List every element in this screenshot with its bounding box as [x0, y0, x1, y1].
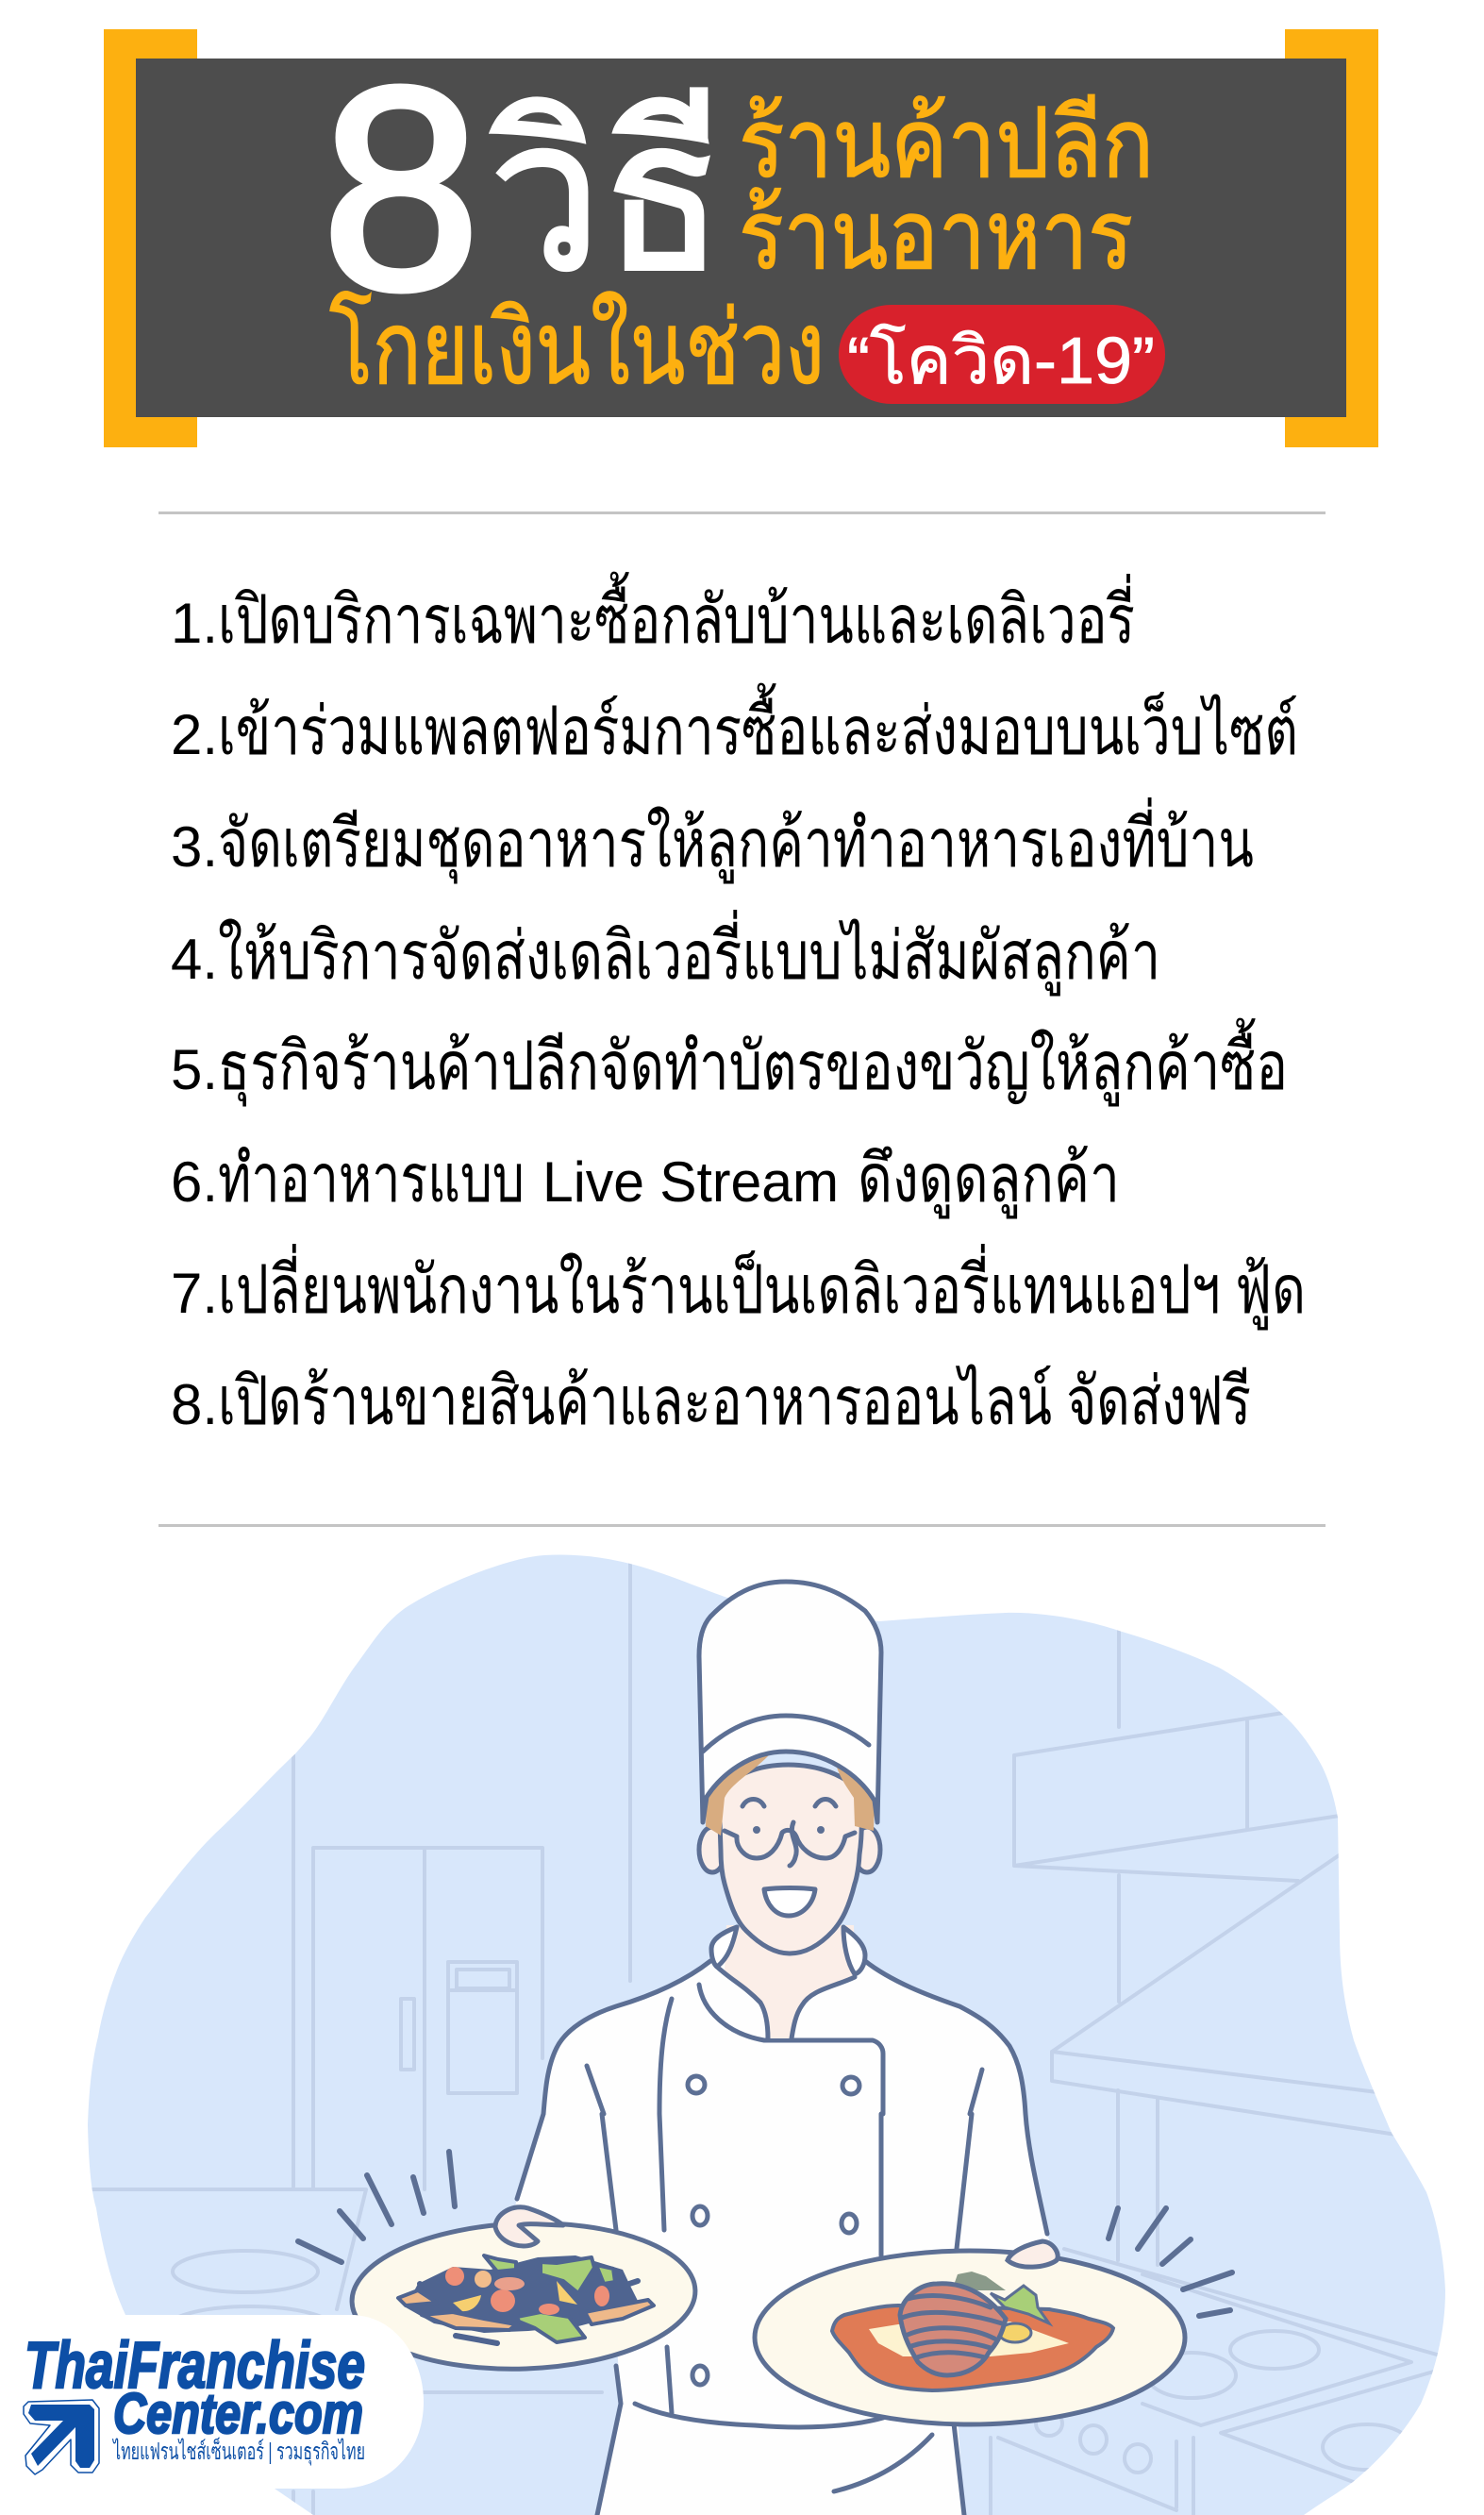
illustration: left plate with salad: [349, 2207, 698, 2374]
steak: [900, 2284, 1006, 2375]
heading: วิธี: วิธี: [489, 76, 725, 314]
mouth: [764, 1887, 815, 1916]
cream: [869, 2322, 1069, 2356]
action lines: right plate: [1109, 2208, 1232, 2316]
eyebrows and eyes: [742, 1799, 836, 1806]
item 1: 1.: [171, 592, 218, 655]
left hand: [495, 2207, 563, 2246]
badge: โควิด-19: [839, 305, 1165, 404]
item 6: ทำอาหารแบบ: [218, 1142, 525, 1216]
chef head: [699, 1755, 880, 1953]
item 7: 7.: [171, 1262, 218, 1325]
chef jacket: [500, 1944, 1057, 2515]
item 5: 5.: [171, 1038, 218, 1101]
item 6: 6.: [171, 1150, 218, 1214]
item 6: ดึงดูดลูกค้า: [858, 1142, 1120, 1219]
item 4: 4.: [171, 928, 218, 991]
heading: ร้านค้าปลีก: ร้านค้าปลีก: [739, 90, 1154, 197]
item 6: Live Stream: [542, 1150, 839, 1214]
logo wordmark: Center.com: Center.com: [113, 2382, 363, 2445]
panel: title banner: [104, 27, 1378, 447]
hair: [706, 1755, 875, 1836]
chef collar: [711, 1927, 865, 2038]
illustration: right plate with steak: [755, 2241, 1185, 2424]
item 5: [171, 1017, 1288, 1107]
dark greens: [952, 2272, 1006, 2290]
item 3: [171, 797, 1254, 884]
kitchen line art: [92, 1562, 1443, 2515]
item 2: 2.: [171, 703, 218, 766]
glasses and nose: [725, 1822, 855, 1866]
right hand: [1008, 2241, 1058, 2267]
item 4: [171, 910, 1160, 997]
salad greens: [484, 2255, 615, 2342]
face: [719, 1765, 861, 1953]
ears: [699, 1827, 725, 1872]
illustration: chef: [500, 1582, 1057, 2515]
item 8: 8.: [171, 1373, 218, 1436]
item 4: ให้บริการจัดส่งเดลิเวอรี่แบบไม่สัมผัสลูกค้า: [218, 910, 1160, 997]
sauce: [832, 2305, 1113, 2390]
heading: โกยเงินในช่วง: โกยเงินในช่วง: [329, 291, 825, 405]
illustration: kitchen background blob: [88, 1554, 1445, 2515]
badge: โควิด-19: “โควิด-19”: [847, 323, 1155, 397]
jacket buttons: [688, 2076, 859, 2385]
egg yolk: [999, 2323, 1031, 2342]
logo: ThaiFranchiseCenter.com: [0, 2315, 424, 2489]
salad base pieces: [398, 2290, 654, 2330]
salad dark stems: [420, 2281, 638, 2343]
heading: number 8: 8: [322, 27, 480, 349]
logo tagline: ไทยแฟรนไชส์เซ็นเตอร์ | รวมธุรกิจไทย: [112, 2437, 365, 2466]
heading: ร้านอาหาร: ร้านอาหาร: [739, 181, 1133, 289]
lettuce: [991, 2286, 1049, 2323]
logo icon: arrow: [24, 2400, 99, 2474]
salad dark mass: [406, 2255, 639, 2333]
chef neck: [725, 1925, 855, 2038]
salad tomatoes and lemon: [445, 2267, 609, 2315]
yellow left bracket: [104, 29, 197, 447]
item 6: [171, 1142, 1120, 1219]
dark banner background: [136, 59, 1346, 417]
chef hat: [699, 1582, 881, 1822]
item 1: เปิดบริการเฉพาะซื้อกลับบ้านและเดลิเวอรี่: [218, 571, 1135, 658]
panel: list of 8 ways: [171, 571, 1306, 1439]
item 3: 3.: [171, 815, 218, 879]
yellow right bracket: [1285, 29, 1378, 447]
item 1: [171, 571, 1135, 658]
logo wordmark: ThaiFranchise: ThaiFranchise: [25, 2328, 365, 2402]
action lines: left plate: [298, 2152, 455, 2262]
